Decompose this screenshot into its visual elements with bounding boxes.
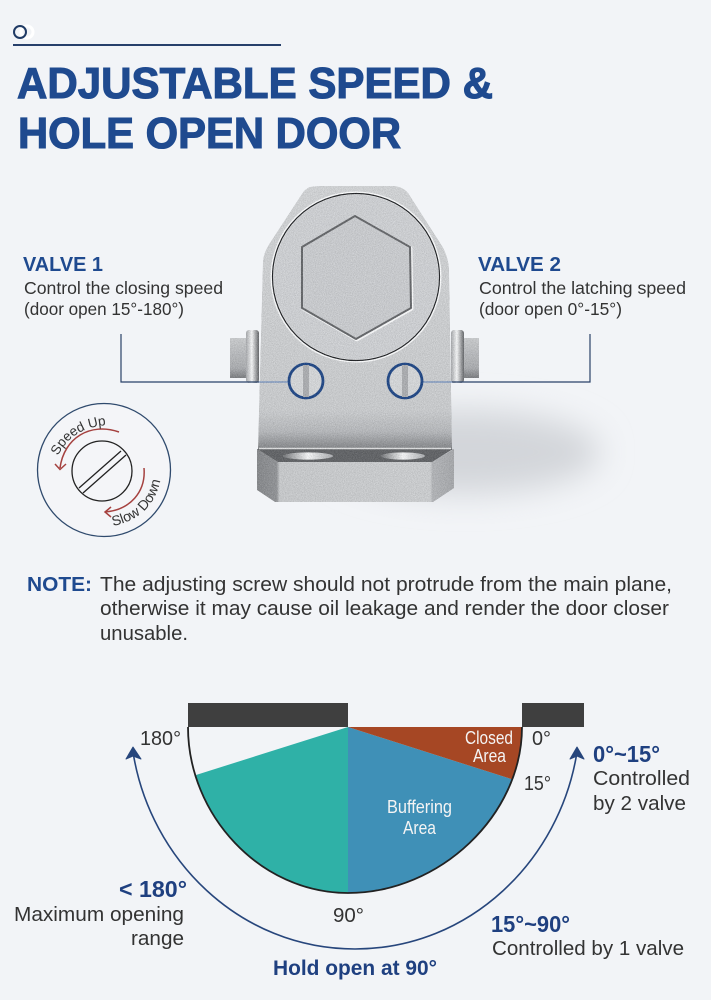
- screw head: [72, 441, 132, 501]
- buffering sector: [348, 727, 512, 892]
- label: slow down: Slow Down: [112, 480, 160, 526]
- title: HOLE OPEN DOOR: [18, 110, 401, 158]
- product: door closer: [230, 186, 479, 502]
- angle labels: 90°: [333, 904, 364, 927]
- callout: less than 180 degrees: [14, 876, 187, 950]
- leader segment on body: [259, 381, 452, 383]
- sectors: [196, 727, 522, 892]
- callout: valve 2: VALVE 2: [478, 254, 561, 276]
- angle labels: 15°: [524, 772, 551, 795]
- callout: less than 180 degrees: < 180°: [119, 876, 187, 902]
- note: unusable.: [100, 623, 188, 645]
- icon: speed adjustment dial: [36, 402, 172, 538]
- callout: 15-90 degrees: Controlled by 1 valve: [492, 937, 684, 960]
- diagram: door opening angles: [126, 703, 584, 949]
- valve screw 1: [289, 364, 323, 398]
- door frame left: [188, 703, 348, 727]
- right side bolt: [451, 330, 479, 383]
- callout: valve 2: Control the latching speed: [479, 278, 686, 298]
- callout: valve 1: [23, 254, 223, 319]
- round cover: [272, 193, 440, 361]
- note: NOTE:: [27, 574, 92, 596]
- header ornament: [13, 26, 281, 46]
- title: ADJUSTABLE SPEED &: [17, 60, 493, 108]
- label: speed up: Speed Up: [51, 417, 105, 454]
- arrow: slow down: [105, 468, 144, 517]
- closed sector: [348, 727, 522, 779]
- arrow: speed up: [55, 429, 119, 470]
- note: [27, 574, 672, 645]
- label: closed area: [465, 728, 513, 766]
- callout: valve 1: (door open 15°-180°): [24, 299, 184, 319]
- label: buffering area: Buffering: [387, 797, 452, 817]
- title: [17, 60, 493, 158]
- callout: valve 2: (door open 0°-15°): [479, 299, 622, 319]
- leader line valve 1: [121, 334, 259, 382]
- arrowhead right: [570, 747, 584, 759]
- note: otherwise it may cause oil leakage and render the door closer: [100, 598, 669, 620]
- callout: 15-90 degrees: [491, 911, 684, 960]
- angle labels: 0°: [532, 727, 551, 750]
- arrowhead left: [126, 747, 141, 759]
- callout: 0-15 degrees: [593, 741, 690, 815]
- base plate: [257, 448, 454, 502]
- callout: 0-15 degrees: by 2 valve: [593, 792, 686, 815]
- product shadow: [330, 410, 600, 494]
- callout: 0-15 degrees: 0°~15°: [593, 741, 660, 767]
- note: The adjusting screw should not protrude from the main plane,: [100, 574, 672, 596]
- semicircle outline: [188, 727, 522, 893]
- left side bolt: [230, 330, 259, 383]
- valve screw 2: [388, 364, 422, 398]
- callout: valve 1: VALVE 1: [23, 254, 103, 276]
- hexagon nut: [302, 216, 412, 340]
- callout: 0-15 degrees: Controlled: [593, 767, 690, 790]
- arrow: range arc: [133, 752, 577, 949]
- teal sector: [196, 727, 348, 892]
- leader line valve 2: [452, 334, 590, 382]
- label: closed area: Closed: [465, 728, 513, 748]
- closer body: [258, 186, 452, 450]
- door frame right: [522, 703, 584, 727]
- angle labels: [140, 727, 551, 927]
- callout: hold open: Hold open at 90°: [273, 956, 437, 980]
- label: buffering area: [387, 797, 452, 838]
- angle labels: 180°: [140, 727, 181, 750]
- callout: 15-90 degrees: 15°~90°: [491, 911, 570, 937]
- callout: less than 180 degrees: range: [131, 927, 184, 950]
- callout: valve 1: Control the closing speed: [24, 278, 223, 298]
- callout: valve 2: [478, 254, 686, 319]
- callout: less than 180 degrees: Maximum opening: [14, 903, 184, 926]
- label: buffering area: Area: [403, 818, 437, 838]
- label: closed area: Area: [473, 746, 507, 766]
